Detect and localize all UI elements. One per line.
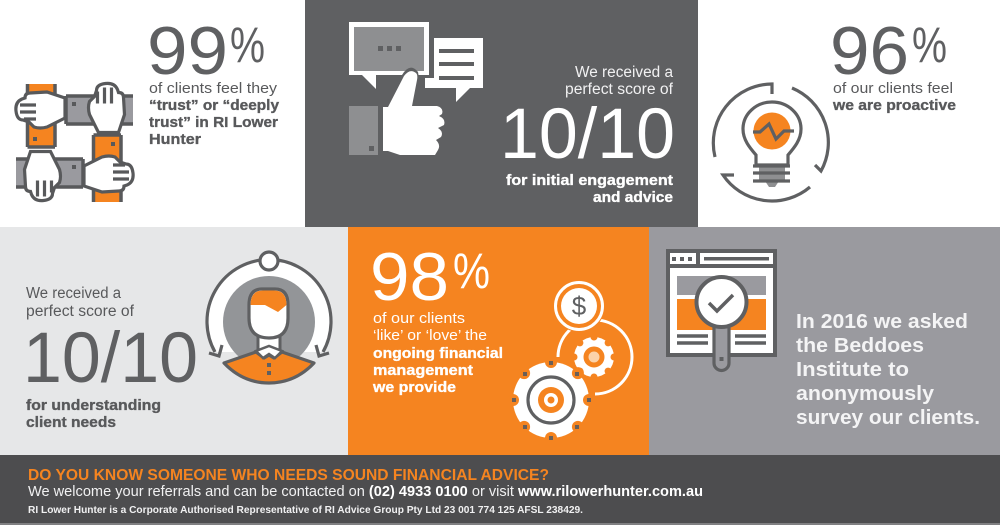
statistic: 96% bbox=[830, 13, 947, 89]
text: financial management description: of our clients bbox=[373, 310, 465, 327]
text: perfect score intro: perfect score of bbox=[26, 303, 135, 320]
icon: gears and dollar coin bbox=[507, 280, 632, 444]
statistic: 99%: 99 bbox=[147, 13, 228, 89]
statistic: 99% bbox=[147, 13, 265, 89]
text: understanding client needs bbox=[26, 397, 161, 431]
text: trust description: trust” in RI Lower bbox=[149, 114, 278, 131]
panel: 99% trust bbox=[0, 0, 305, 227]
text: financial management description bbox=[372, 310, 503, 396]
icon: browser window with magnifier bbox=[666, 249, 777, 370]
text: perfect score intro: perfect score of bbox=[565, 81, 674, 98]
text: perfect score intro: We received a bbox=[575, 64, 673, 81]
footer band bbox=[0, 455, 1000, 525]
text: financial management description: we provide bbox=[372, 379, 456, 396]
footer heading: DO YOU KNOW SOMEONE WHO NEEDS SOUND FINANCIAL ADVICE? bbox=[28, 467, 549, 484]
icon: gears and dollar coin: $ bbox=[572, 291, 587, 321]
icon: four interlocking hands bbox=[16, 83, 133, 202]
statistic: 98%: 98 bbox=[370, 239, 449, 315]
icon: person with circular arrows bbox=[207, 252, 331, 383]
statistic: 99%: % bbox=[230, 17, 265, 73]
panel: 96% proactive bbox=[698, 0, 1000, 227]
footer legal line: RI Lower Hunter is a Corporate Authorised Representative of RI Advice Group Pty Ltd 23 001 774 125 AFSL 238429. bbox=[28, 504, 583, 516]
panel: survey note bbox=[649, 227, 1000, 455]
text: initial engagement and advice bbox=[506, 172, 673, 206]
text: proactive description bbox=[832, 80, 956, 114]
text: financial management description: ‘like’ or ‘love’ the bbox=[373, 327, 487, 344]
text: financial management description: management bbox=[373, 362, 473, 379]
text: survey statement: the Beddoes bbox=[796, 335, 924, 357]
text: perfect score intro: We received a bbox=[26, 285, 121, 302]
statistic: 98% bbox=[370, 239, 490, 315]
text: trust description: “trust” or “deeply bbox=[149, 97, 280, 114]
text: trust description: of clients feel they bbox=[149, 80, 278, 97]
panel: 98% financial management bbox=[348, 227, 649, 455]
text: survey statement: In 2016 we asked bbox=[796, 311, 968, 333]
statistic: 96%: 96 bbox=[830, 13, 909, 89]
text: proactive description: we are proactive bbox=[832, 97, 956, 114]
text: survey statement: survey our clients. bbox=[796, 407, 980, 429]
footer contact line: We welcome your referrals and can be contacted on (02) 4933 0100 or visit www.rilowerhunter.com.au bbox=[28, 483, 703, 500]
icon: thumbs up with speech bubbles bbox=[349, 22, 483, 155]
panel: 10/10 client needs bbox=[0, 227, 348, 455]
statistic: 96%: % bbox=[912, 17, 947, 73]
statistic: 10/10: 10/10 bbox=[500, 95, 675, 174]
text: understanding client needs: for understanding bbox=[26, 397, 161, 414]
panel: 10/10 initial engagement bbox=[305, 0, 698, 227]
text: initial engagement and advice: for initial engagement bbox=[506, 172, 673, 189]
text: trust description bbox=[149, 80, 280, 148]
text: perfect score intro bbox=[565, 64, 674, 98]
statistic: 10/10: 10/10 bbox=[23, 319, 198, 398]
statistic: 98%: % bbox=[453, 243, 490, 299]
text: survey statement: anonymously bbox=[796, 383, 935, 405]
text: trust description: Hunter bbox=[149, 131, 201, 148]
icon: light bulb with circular arrows bbox=[713, 84, 828, 201]
text: financial management description: ongoing financial bbox=[373, 345, 503, 362]
text: understanding client needs: client needs bbox=[26, 414, 116, 431]
text: proactive description: of our clients feel bbox=[833, 80, 953, 97]
text: initial engagement and advice: and advice bbox=[593, 189, 673, 206]
text: perfect score intro bbox=[26, 285, 135, 320]
text: survey statement bbox=[796, 311, 980, 429]
text: survey statement: Institute to bbox=[796, 359, 909, 381]
